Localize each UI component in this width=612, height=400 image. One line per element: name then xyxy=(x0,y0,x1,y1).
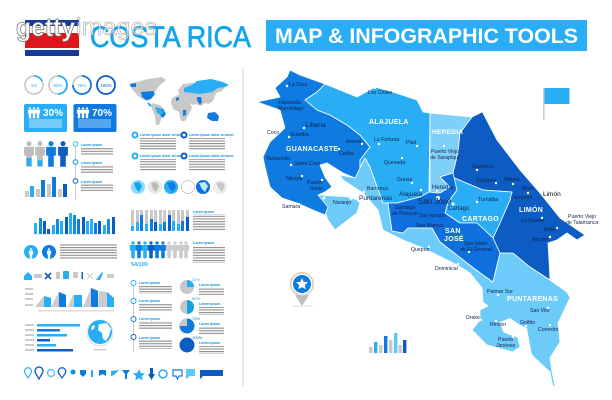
location marker with star xyxy=(290,272,314,307)
timeline xyxy=(73,142,113,200)
stat card 30%: 30% xyxy=(43,108,63,119)
progress rings: 50% xyxy=(53,83,63,88)
city labels: de Talamanca xyxy=(566,220,598,226)
city labels: Pital xyxy=(406,140,416,146)
city labels: Rincón xyxy=(490,322,506,328)
pie charts: 50% xyxy=(192,296,200,301)
people statistic: 54/100 xyxy=(131,262,148,268)
map region labels: SAN xyxy=(445,228,461,235)
map region labels: CARTAGO xyxy=(462,216,499,223)
city labels: San Isidro xyxy=(464,241,487,247)
stat card 30% xyxy=(24,104,67,132)
city labels: Golfito xyxy=(520,320,535,326)
region: Cartago xyxy=(445,177,512,238)
globe xyxy=(87,320,113,350)
city labels: Samara xyxy=(282,204,300,210)
panel divider xyxy=(242,68,244,386)
map region labels: HEREDIA xyxy=(432,129,463,136)
city labels: Murciélago xyxy=(278,106,303,112)
city labels: Santiago xyxy=(395,205,416,211)
male and female icons with text xyxy=(24,244,117,259)
region: San José xyxy=(388,173,500,282)
people statistic xyxy=(130,241,225,268)
travel icons row xyxy=(24,271,114,280)
globes row xyxy=(131,180,227,194)
city labels: Jesús xyxy=(309,186,323,192)
city labels: Guacimo xyxy=(472,164,493,170)
info blocks: Lorem ipsum dolor sit amet xyxy=(140,154,185,158)
small flag pin xyxy=(543,88,570,120)
pie charts: Lorem Ipsum xyxy=(199,341,220,345)
city labels: Moín xyxy=(522,186,534,192)
vertical timeline: Lorem Ipsum xyxy=(139,281,160,285)
city labels: San Marcos xyxy=(416,223,444,229)
city labels: de Puriscal xyxy=(392,211,418,217)
watermark: images xyxy=(76,14,157,41)
map region labels xyxy=(286,119,558,303)
city labels: Santa Cruz xyxy=(294,161,320,167)
city labels: de Sarapiquí xyxy=(430,155,460,161)
pie charts: 75% xyxy=(192,316,200,321)
city labels: Corredor xyxy=(538,327,559,333)
header banner: MAP & INFOGRAPHIC TOOLS xyxy=(275,25,578,48)
people statistic: Lorem Ipsum xyxy=(193,241,214,245)
info blocks xyxy=(132,132,234,171)
info blocks: Lorem ipsum dolor sit amet xyxy=(189,154,234,158)
small bar chart xyxy=(25,177,67,197)
map region labels: GUANACASTE xyxy=(286,146,338,153)
city labels: La Guaria xyxy=(521,218,544,224)
city labels: Hacienda xyxy=(279,100,301,106)
map pins row xyxy=(25,367,223,380)
city labels: Las Chiles xyxy=(368,90,393,96)
city labels: Arenal xyxy=(346,139,361,145)
pie charts: Lorem Ipsum xyxy=(199,302,220,306)
stat card 70%: 70% xyxy=(92,108,112,119)
map region labels: JOSÉ xyxy=(444,234,464,243)
progress rings: 1% xyxy=(31,83,37,88)
area chart xyxy=(25,288,114,312)
Costa Rica map xyxy=(257,70,585,387)
city labels: Barranca xyxy=(367,186,388,192)
city labels: La Cruz xyxy=(289,82,308,88)
timeline: Lorem Ipsum xyxy=(81,143,102,147)
pie charts: Lorem Ipsum xyxy=(199,322,220,326)
city labels: de El General xyxy=(460,247,492,253)
city labels: Puerto xyxy=(498,337,513,343)
timeline: Lorem Ipsum xyxy=(81,180,102,184)
mini bar chart xyxy=(369,333,406,353)
city labels: Naranjo xyxy=(333,200,351,206)
horizontal bars xyxy=(25,324,80,352)
city labels: Grecia xyxy=(397,177,412,183)
timeline: Lorem Ipsum xyxy=(81,161,102,165)
city labels: Siquirres xyxy=(476,178,497,184)
city labels: Limón xyxy=(543,191,561,198)
city labels: Turrialba xyxy=(478,197,498,203)
vertical timeline: Lorem Ipsum xyxy=(139,299,160,303)
vertical timeline: Lorem Ipsum xyxy=(139,336,160,340)
city labels: Coco xyxy=(267,130,279,136)
city labels: Liverpool xyxy=(511,195,532,201)
city labels: San Ignacio xyxy=(419,213,447,219)
city labels: Matina xyxy=(504,177,520,183)
vertical timeline: Lorem Ipsum xyxy=(139,317,160,321)
progress rings: 100% xyxy=(100,83,112,88)
city labels: Heredia xyxy=(432,185,454,191)
city labels: Cartago xyxy=(448,206,470,212)
city labels: Puerto Viejo xyxy=(568,214,596,220)
city labels: Quepos xyxy=(411,247,430,253)
progress rings xyxy=(25,76,115,94)
city labels: San Vito xyxy=(530,308,550,314)
watermark: getty xyxy=(16,12,76,42)
stacked columns with text: Lorem Ipsum xyxy=(193,210,214,214)
city labels: Jiménez xyxy=(496,343,516,349)
city labels xyxy=(266,82,598,349)
city labels: Palmar Sur xyxy=(487,289,513,295)
city labels: Guardia xyxy=(290,132,309,138)
info blocks: Lorem ipsum dolor sit amet xyxy=(140,133,185,137)
title: COSTA RICA xyxy=(90,21,251,54)
pie charts: Lorem Ipsum xyxy=(199,283,220,287)
city labels: Alajuela xyxy=(399,191,423,198)
stat card 70% xyxy=(74,104,116,132)
city labels: Dominical xyxy=(435,266,458,272)
city labels: Cañas xyxy=(339,151,354,157)
city labels: Tamarindo xyxy=(266,156,290,162)
city markers xyxy=(286,85,558,338)
city labels: Nicoya xyxy=(286,176,302,182)
city labels: Bribrí xyxy=(544,227,557,233)
pie charts xyxy=(180,277,224,354)
map region labels: LIMÓN xyxy=(519,205,543,214)
progress rings: 75% xyxy=(77,83,87,88)
map region labels: ALAJUELA xyxy=(369,119,409,126)
header banner xyxy=(266,20,587,51)
city labels: Puntarenas xyxy=(359,195,393,202)
city labels: Puerto Viejo xyxy=(431,149,459,155)
map region labels: PUNTARENAS xyxy=(507,296,558,303)
region: Alajuela xyxy=(305,84,430,203)
city labels: Amubri xyxy=(532,237,548,243)
vertical timeline xyxy=(131,280,172,352)
city labels: San José xyxy=(418,197,452,206)
region: Puntarenas xyxy=(318,158,570,387)
pie charts: 100% xyxy=(192,335,203,340)
city labels: La Fortuna xyxy=(374,137,399,143)
flag of Costa Rica xyxy=(25,20,79,56)
city labels: Quesada xyxy=(384,160,405,166)
people comparison xyxy=(24,141,68,167)
region: Heredia xyxy=(430,113,472,193)
world map xyxy=(129,77,229,125)
wide column chart xyxy=(33,213,116,235)
info blocks: Lorem ipsum dolor sit amet xyxy=(189,133,234,137)
stacked columns with text xyxy=(131,210,225,231)
city labels: Puerto xyxy=(307,180,322,186)
city labels: Drake xyxy=(466,315,480,321)
watermark xyxy=(16,12,157,42)
region: Guanacaste xyxy=(257,70,370,215)
pie charts: 25% xyxy=(192,277,200,282)
city labels: Liberia xyxy=(306,122,326,129)
region: Limón xyxy=(452,98,585,280)
